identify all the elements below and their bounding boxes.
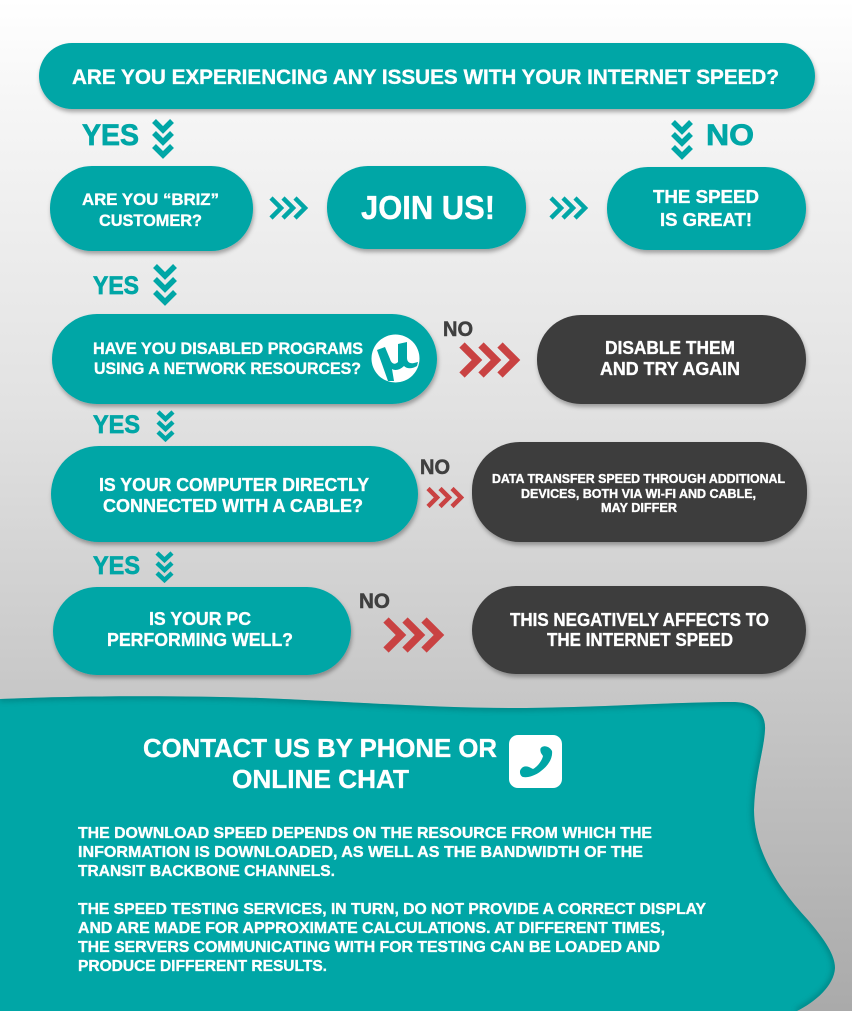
node: pc performing: PERFORMING WELL? <box>107 630 293 650</box>
node: negative effect <box>472 586 806 674</box>
text block: speed testing <box>78 901 707 975</box>
node: directly connected: IS YOUR COMPUTER DIRECTLY <box>99 475 369 495</box>
heading: contact us <box>143 733 497 794</box>
label: fourth yes: YES <box>93 552 140 580</box>
node: disabled programs <box>52 314 437 404</box>
node: briz customer: CUSTOMER? <box>99 211 202 230</box>
heading: contact us: ONLINE CHAT <box>232 764 409 794</box>
text block: download speed: THE DOWNLOAD SPEED DEPENDS ON THE RESOURCE FROM WHICH THE <box>78 825 652 842</box>
node: data transfer note <box>472 442 807 542</box>
node: data transfer note: MAY DIFFER <box>601 501 677 515</box>
node: disabled programs: HAVE YOU DISABLED PROGRAMS <box>93 340 363 358</box>
node: speed is great: THE SPEED <box>653 186 759 207</box>
arrow: red no three <box>386 620 439 650</box>
text block: download speed: TRANSIT BACKBONE CHANNELS. <box>78 863 335 880</box>
text block: speed testing: AND ARE MADE FOR APPROXIMATE CALCULATIONS. AT DIFFERENT TIMES, <box>78 920 665 937</box>
label: second yes <box>93 266 175 302</box>
arrow: red no one <box>462 345 515 375</box>
arrow: red no two <box>428 488 461 506</box>
node: directly connected: CONNECTED WITH A CABLE? <box>103 496 363 516</box>
arrow: first yes down chevrons <box>154 121 172 155</box>
label: no one: NO <box>443 318 473 341</box>
node: speed is great: IS GREAT! <box>660 209 752 230</box>
node: data transfer note: DEVICES, BOTH VIA WI-FI AND CABLE, <box>521 487 756 501</box>
heading: contact us: CONTACT US BY PHONE OR <box>143 733 497 763</box>
node: speed is great <box>607 167 806 250</box>
title pill <box>39 43 815 109</box>
panel: contact footer <box>0 696 835 1011</box>
text block: download speed: INFORMATION IS DOWNLOADED, AS WELL AS THE BANDWIDTH OF THE <box>78 844 643 861</box>
node: join us <box>327 166 526 249</box>
label: no three: NO <box>359 590 390 613</box>
label: first yes <box>82 119 172 155</box>
label: first no <box>673 119 754 156</box>
text block: speed testing: THE SPEED TESTING SERVICES, IN TURN, DO NOT PROVIDE A CORRECT DISPLAY <box>78 901 707 918</box>
node: data transfer note: DATA TRANSFER SPEED THROUGH ADDITIONAL <box>492 472 785 486</box>
arrow: join to great <box>551 198 585 218</box>
node: pc performing: IS YOUR PC <box>149 609 251 629</box>
node: disable them: DISABLE THEM <box>605 338 735 358</box>
arrow: fourth yes chevrons <box>157 553 172 580</box>
label: second yes: YES <box>93 272 139 300</box>
label: first no: NO <box>706 119 754 152</box>
icon: utorrent <box>372 334 420 382</box>
node: disable them <box>537 315 806 404</box>
node: briz customer: ARE YOU “BRIZ” <box>82 190 219 209</box>
node: briz customer <box>50 166 253 251</box>
node: negative effect: THIS NEGATIVELY AFFECTS TO <box>510 609 769 630</box>
node: disable them: AND TRY AGAIN <box>600 359 740 379</box>
label: fourth yes <box>93 552 172 580</box>
node: directly connected <box>51 446 418 542</box>
node: negative effect: THE INTERNET SPEED <box>547 629 733 650</box>
node: join us: JOIN US! <box>361 189 495 226</box>
text block: speed testing: THE SERVERS COMMUNICATING WITH FOR TESTING CAN BE LOADED AND <box>78 939 660 956</box>
label: third yes: YES <box>93 411 140 439</box>
icon: phone <box>509 735 562 788</box>
label: third yes <box>93 411 173 439</box>
title pill: ARE YOU EXPERIENCING ANY ISSUES WITH YOUR INTERNET SPEED? <box>72 66 779 89</box>
node: disabled programs: USING A NETWORK RESOURCES? <box>94 360 361 378</box>
arrow: second yes chevrons <box>155 266 175 302</box>
label: no two: NO <box>420 456 450 479</box>
text block: speed testing: PRODUCE DIFFERENT RESULTS. <box>78 958 327 975</box>
arrow: third yes chevrons <box>158 412 173 439</box>
arrow: briz to join <box>271 198 305 218</box>
text block: download speed <box>78 825 652 880</box>
label: first yes: YES <box>82 119 139 152</box>
arrow: first no down chevrons <box>673 122 691 156</box>
node: pc performing <box>53 587 351 675</box>
